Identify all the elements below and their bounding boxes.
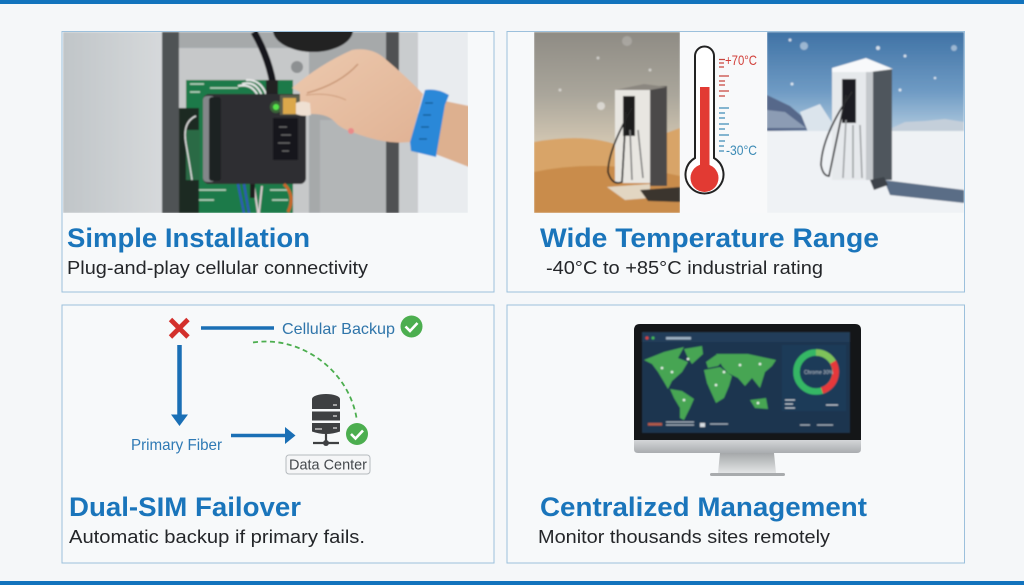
donut chart (796, 352, 836, 392)
panel: dual-SIM failover (62, 305, 494, 563)
panel: simple installation (62, 8, 494, 292)
heading: wide temperature range: Wide Temperature Range (540, 223, 879, 253)
icon: red cross (170, 320, 188, 337)
photo: charger in snow (767, 32, 964, 213)
dashed backup path (253, 341, 357, 421)
text: industrial rating: -40°C to +85°C industrial rating (546, 257, 823, 278)
arrow: down (171, 345, 188, 426)
world map (644, 346, 776, 420)
icon: check server (346, 423, 368, 445)
label: +70C: +70°C (725, 52, 757, 68)
dashboard screen (642, 332, 850, 433)
panel: centralized management (507, 305, 964, 563)
text: plug-and-play: Plug-and-play cellular connectivity (67, 257, 369, 278)
photo: charger in desert (534, 32, 680, 213)
text: automatic backup: Automatic backup if primary fails. (69, 526, 365, 547)
label: -30C: -30°C (726, 142, 757, 158)
thermometer panel (680, 32, 767, 213)
heading: dual-SIM failover: Dual-SIM Failover (69, 492, 302, 522)
line: to cellular backup (201, 326, 274, 330)
text: monitor thousands: Monitor thousands sites remotely (538, 526, 831, 547)
icon: thermometer (686, 46, 729, 193)
label: primary fiber: Primary Fiber (131, 437, 223, 454)
icon: server (312, 394, 340, 446)
arrow: right (231, 427, 296, 444)
panel: wide temperature range (507, 32, 964, 292)
top accent bar (0, 0, 1024, 4)
dashboard screen: Chrome 30% (804, 370, 834, 376)
icon: monitor with dashboard (634, 324, 861, 476)
heading: centralized management: Centralized Management (540, 492, 867, 522)
heading: simple installation: Simple Installation (67, 223, 310, 253)
icon: check top (400, 316, 422, 338)
bottom accent bar (0, 581, 1024, 585)
label: cellular backup: Cellular Backup (282, 321, 395, 338)
photo: hand inserting SIM into router (63, 32, 468, 213)
label: data center: Data Center (289, 456, 367, 474)
